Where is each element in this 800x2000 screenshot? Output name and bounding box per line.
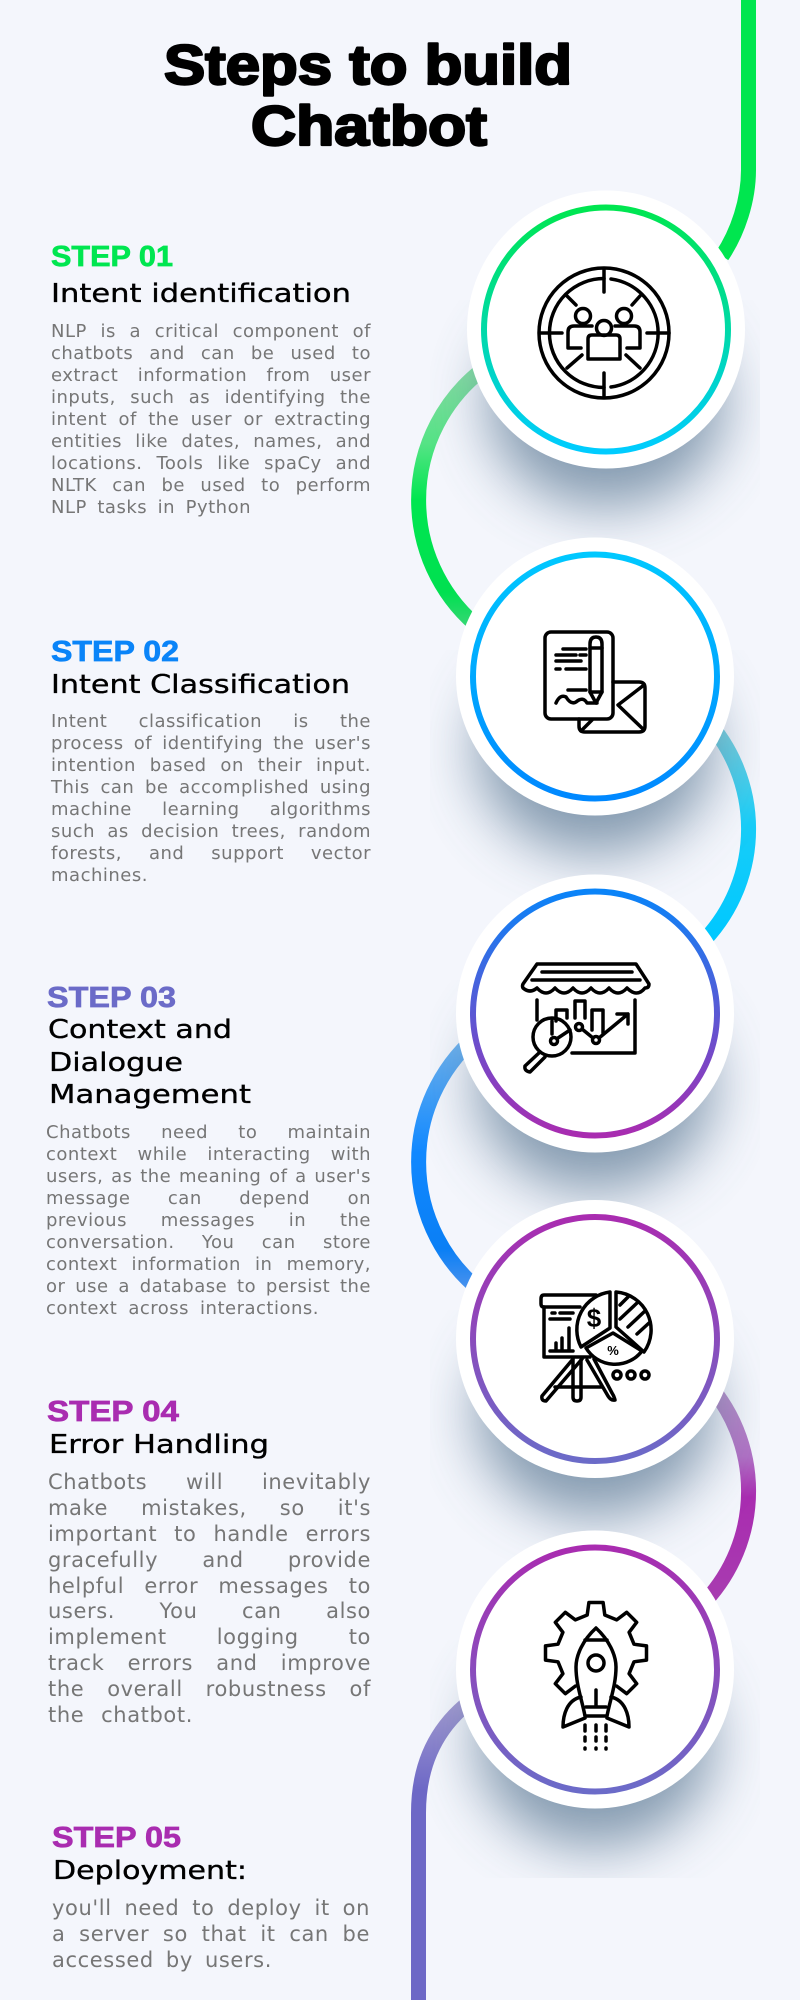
circle 5 with icon <box>456 1530 734 1808</box>
step 03 text: users, as the meaning of a user's <box>46 1166 371 1187</box>
path segment: green curve <box>419 370 482 630</box>
step 03 text: Chatbots need to maintain <box>46 1122 371 1143</box>
step 03 heading: Context and <box>48 1015 232 1045</box>
path segment: magenta curve <box>706 1381 749 1601</box>
step 04 text: users. You can also <box>48 1599 371 1623</box>
circle shadow 5 <box>477 1637 713 1847</box>
icon: document, pen and envelope <box>545 632 645 732</box>
step 04 text: the overall robustness of <box>48 1677 371 1701</box>
step 01 text: NLP tasks in Python <box>51 497 251 518</box>
step 02 text: machine learning algorithms <box>51 799 371 820</box>
step 02 heading: Intent Classification <box>51 670 350 700</box>
step 03 heading <box>47 982 251 1110</box>
panel: step 01 <box>51 241 371 518</box>
title <box>164 33 572 157</box>
step 02 text: such as decision trees, random <box>51 821 371 842</box>
step 01 text: entities like dates, names, and <box>51 431 371 452</box>
step 04 text: make mistakes, so it's <box>48 1496 371 1520</box>
step 04 text: implement logging to <box>48 1625 371 1649</box>
step 05 text: a server so that it can be <box>52 1922 370 1946</box>
step 03 heading: STEP 03 <box>47 982 176 1014</box>
step 01 text: NLP is a critical component of <box>51 321 371 342</box>
panel: step 02 <box>50 636 371 886</box>
step 03 text: or use a database to persist the <box>46 1276 371 1297</box>
icon label: dollar sign: $ <box>587 1303 602 1333</box>
step 01 heading: Intent identification <box>51 279 351 309</box>
path segment: bottom purple line <box>418 1693 482 2000</box>
step 04 text: the chatbot. <box>48 1703 193 1727</box>
step 03 heading: Management <box>49 1080 251 1110</box>
step 05 heading: STEP 05 <box>52 1822 181 1854</box>
step 02 text: process of identifying the user's <box>51 733 371 754</box>
circle 4 with icon <box>456 1200 734 1478</box>
step 02 text <box>50 711 371 886</box>
icon: rocket and gear <box>546 1602 646 1749</box>
step 03 text: context while interacting with <box>46 1144 371 1165</box>
step 05 text: you'll need to deploy it on <box>52 1896 370 1920</box>
step 01 heading <box>51 241 351 309</box>
title: Chatbot <box>251 94 487 157</box>
panel: step 03 <box>46 982 371 1319</box>
step 04 text: helpful error messages to <box>48 1574 371 1598</box>
step 05 text <box>52 1896 370 1972</box>
step 03 text <box>46 1122 371 1319</box>
step 02 heading: STEP 02 <box>51 636 179 668</box>
circle 3 with icon <box>456 874 734 1152</box>
panel: step 05 <box>52 1822 370 1972</box>
step 01 text <box>51 321 371 518</box>
circle shadow 4 <box>477 1307 713 1517</box>
path segment: blue curve <box>419 1032 482 1292</box>
step 02 text: intention based on their input. <box>51 755 371 776</box>
step 02 text: Intent classification is the <box>51 711 371 732</box>
circle 1 with icon <box>467 190 745 468</box>
step 02 text: forests, and support vector <box>51 843 371 864</box>
step 01 text: inputs, such as identifying the <box>51 387 371 408</box>
step 02 heading <box>51 636 350 700</box>
title: Steps to build <box>164 33 572 96</box>
icon: presentation board with pie chart <box>541 1292 651 1401</box>
step 04 text: Chatbots will inevitably <box>48 1470 371 1494</box>
step 01 text: chatbots and can be used to <box>51 343 371 364</box>
step 04 heading: STEP 04 <box>47 1396 179 1428</box>
path segment: cyan curve <box>706 719 749 939</box>
step 04 text <box>48 1470 371 1727</box>
step 02 text: machines. <box>51 865 148 886</box>
step 01 text: intent of the user or extracting <box>51 409 371 430</box>
icon: target group of people <box>539 268 669 398</box>
step 04 heading <box>47 1396 269 1460</box>
step 04 text: important to handle errors <box>48 1522 371 1546</box>
step 04 heading: Error Handling <box>49 1430 269 1460</box>
step 03 heading: Dialogue <box>49 1048 183 1078</box>
step 01 heading: STEP 01 <box>51 241 173 273</box>
circle shadow 1 <box>488 297 724 507</box>
step 03 text: message can depend on <box>46 1188 371 1209</box>
step 03 text: context information in memory, <box>46 1254 371 1275</box>
step 03 text: conversation. You can store <box>46 1232 371 1253</box>
panel: step 04 <box>47 1396 371 1727</box>
circle shadow 2 <box>477 644 713 854</box>
step 02 text: This can be accomplished using <box>51 777 371 798</box>
step 01 text: extract information from user <box>51 365 371 386</box>
step 05 text: accessed by users. <box>52 1948 272 1972</box>
icon label: percent sign: % <box>607 1343 619 1358</box>
step 03 text: context across interactions. <box>46 1298 319 1319</box>
step 03 text: previous messages in the <box>46 1210 371 1231</box>
infographic path, shadows and icon circles <box>411 0 760 2000</box>
step 01 text: NLTK can be used to perform <box>51 475 371 496</box>
step 01 text: locations. Tools like spaCy and <box>51 453 371 474</box>
step 04 text: track errors and improve <box>48 1651 371 1675</box>
step 04 text: gracefully and provide <box>48 1548 371 1572</box>
circle 2 with icon <box>456 538 734 816</box>
icon: shop with chart and magnifier <box>522 964 649 1072</box>
path segment: top green line <box>722 0 748 256</box>
step 05 heading: Deployment: <box>53 1856 247 1886</box>
step 05 heading <box>52 1822 247 1886</box>
circle shadow 3 <box>477 981 713 1191</box>
